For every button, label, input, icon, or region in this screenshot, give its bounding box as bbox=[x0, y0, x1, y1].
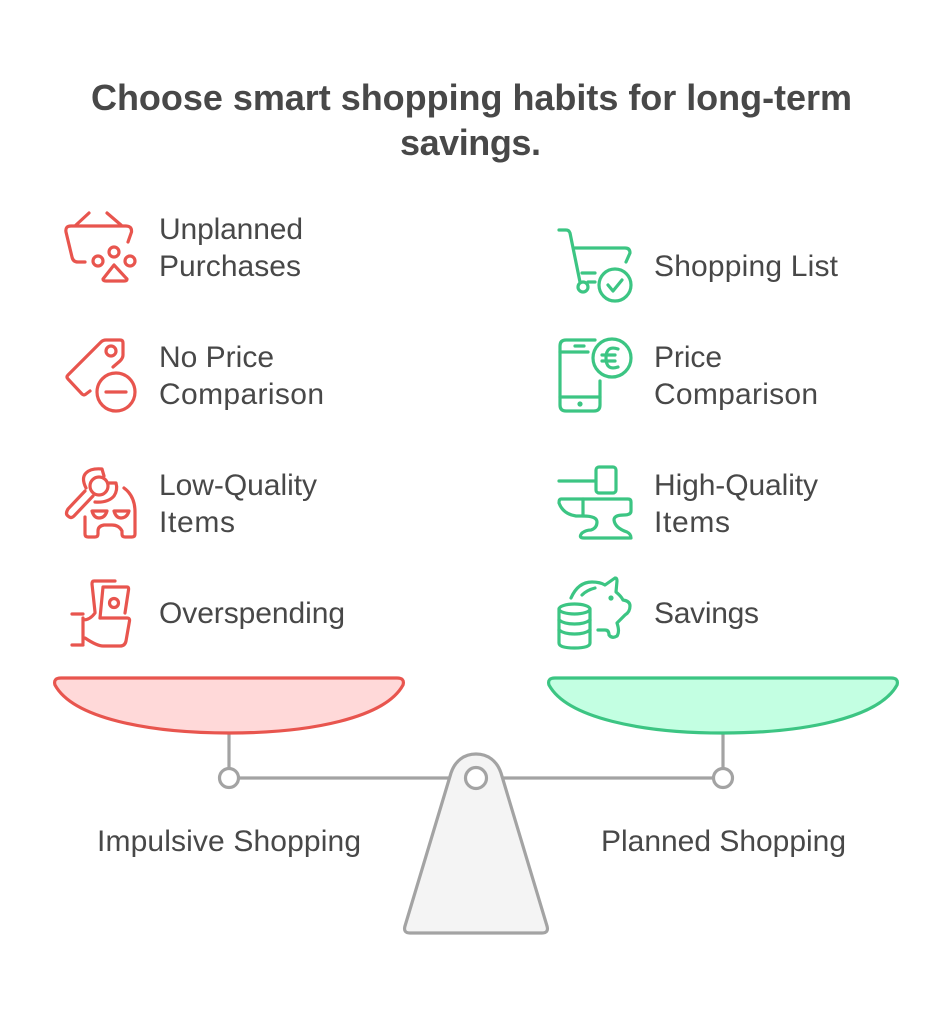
title: savings. bbox=[400, 122, 541, 163]
title: Choose smart shopping habits for long-term bbox=[91, 77, 852, 118]
label: impulsive shopping: Impulsive Shopping bbox=[97, 825, 361, 858]
title bbox=[91, 77, 852, 163]
panel: planned shopping items bbox=[559, 230, 839, 648]
label: no price comparison bbox=[159, 341, 324, 411]
label: overspending: Overspending bbox=[159, 597, 345, 630]
label: high-quality items: High-Quality bbox=[654, 469, 818, 502]
icon: basket with shapes bbox=[66, 213, 135, 281]
icon: anvil and hammer bbox=[559, 467, 631, 538]
icon: money in hand bbox=[72, 581, 130, 646]
label: low-quality items: Items bbox=[159, 506, 235, 539]
label: price comparison bbox=[654, 341, 818, 411]
label: planned shopping: Planned Shopping bbox=[601, 825, 846, 858]
pan: impulsive shopping bbox=[55, 678, 403, 733]
label: high-quality items bbox=[654, 469, 818, 539]
label: unplanned purchases: Purchases bbox=[159, 250, 301, 283]
icon: phone with euro bbox=[560, 339, 631, 411]
label: unplanned purchases: Unplanned bbox=[159, 213, 303, 246]
scale beam bbox=[220, 733, 732, 788]
label: low-quality items: Low-Quality bbox=[159, 469, 317, 502]
label: unplanned purchases bbox=[159, 213, 303, 283]
icon: piggy bank and coins bbox=[559, 578, 630, 648]
label: price comparison: Comparison bbox=[654, 378, 818, 411]
fulcrum bbox=[405, 754, 547, 933]
icon: price tag with minus bbox=[67, 340, 135, 411]
label: shopping list: Shopping List bbox=[654, 250, 839, 283]
label: no price comparison: Comparison bbox=[159, 378, 324, 411]
panel: impulsive shopping items bbox=[66, 213, 345, 646]
icon: cart with check bbox=[559, 230, 631, 301]
label: price comparison: Price bbox=[654, 341, 722, 374]
pan: planned shopping bbox=[549, 678, 897, 733]
label: no price comparison: No Price bbox=[159, 341, 274, 374]
label: high-quality items: Items bbox=[654, 506, 730, 539]
label: savings: Savings bbox=[654, 597, 759, 630]
label: low-quality items bbox=[159, 469, 317, 539]
icon: broken item with axe bbox=[66, 469, 135, 537]
chart: balance scale bbox=[55, 678, 897, 933]
